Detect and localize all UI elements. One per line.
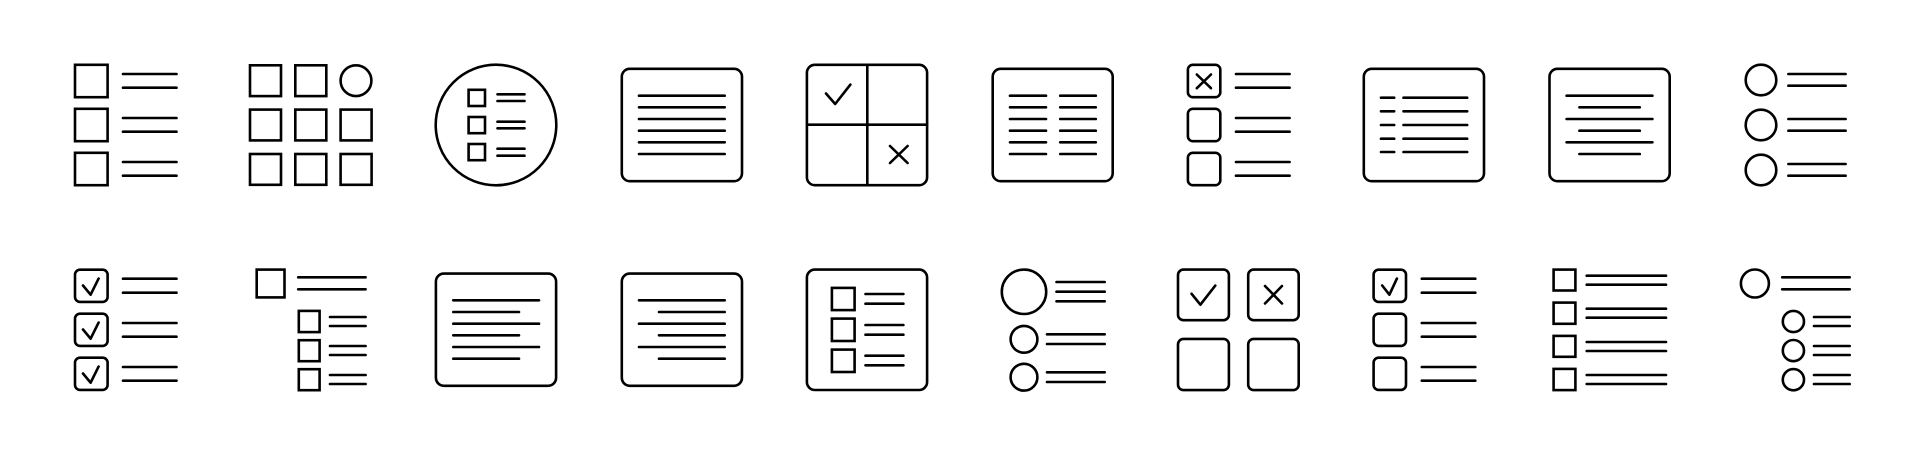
icon: checklist in a circle [436, 65, 556, 185]
icon: document with centred text [1550, 69, 1670, 181]
icon: document with bulleted lines [1364, 69, 1484, 181]
icon: document with two text columns [993, 69, 1113, 181]
icon: four-item square list [1554, 270, 1666, 390]
icon: nested square list [257, 270, 366, 390]
icon: document with left-aligned text [436, 274, 556, 386]
icon: four tiles with check and cross [1178, 270, 1299, 390]
icon: nested circle list [1741, 270, 1850, 390]
icon: rounded checklist with one check [1374, 270, 1475, 390]
icon: rounded checklist with cross [1188, 65, 1290, 185]
icon: grid of squares with a circle [250, 65, 372, 185]
icon: four-part table with check and cross [807, 65, 927, 185]
icon: circle list [1746, 65, 1846, 185]
icon: circle list with large first item [1002, 270, 1105, 391]
icon: fully checked list [75, 270, 176, 390]
icon: square checklist [75, 65, 176, 185]
icon: document with right-aligned text [622, 274, 742, 386]
icon: document with square checklist [807, 270, 927, 390]
icon: document with justified text [622, 69, 742, 181]
